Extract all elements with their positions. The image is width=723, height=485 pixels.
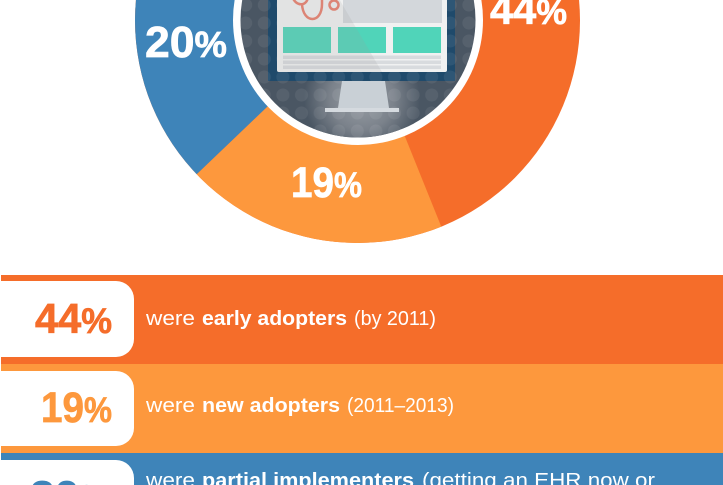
icon: stethoscope bbox=[292, 0, 338, 19]
value: 19% bbox=[41, 384, 112, 432]
row: early adopters bbox=[0, 275, 723, 364]
band bbox=[1, 364, 723, 453]
label: 20%: 20% bbox=[145, 18, 227, 67]
segment: 44% early adopters bbox=[135, 0, 580, 243]
dark circle background bbox=[240, 0, 476, 138]
central monitor illustration bbox=[233, 0, 483, 156]
row: partial implementers bbox=[0, 453, 723, 485]
description: (2011–2013) bbox=[347, 395, 454, 417]
dot texture bbox=[240, 0, 476, 138]
band bbox=[1, 275, 723, 364]
value: 44% bbox=[35, 295, 112, 342]
white tab bbox=[0, 371, 134, 446]
description: new adopters bbox=[202, 395, 340, 417]
donut chart bbox=[135, 0, 580, 243]
top panel bbox=[343, 0, 442, 23]
segment: 19% new adopters bbox=[196, 106, 442, 243]
description bbox=[146, 310, 435, 329]
band bbox=[1, 453, 723, 485]
description: were bbox=[145, 395, 195, 417]
white tab bbox=[0, 281, 134, 357]
row: new adopters bbox=[0, 364, 723, 453]
description bbox=[146, 397, 453, 416]
description: early adopters bbox=[202, 308, 347, 330]
monitor stand bbox=[338, 81, 389, 108]
label: 19%: 19% bbox=[291, 159, 362, 207]
description bbox=[146, 472, 655, 485]
monitor bezel bbox=[268, 0, 455, 81]
screen diagonal shade bbox=[277, 0, 382, 72]
segment: 20% partial implementers bbox=[135, 0, 268, 174]
white tab bbox=[0, 460, 134, 485]
screen bbox=[277, 0, 447, 72]
text lines on screen bbox=[283, 56, 441, 69]
description: (by 2011) bbox=[354, 308, 436, 330]
glow under monitor bbox=[308, 81, 416, 138]
description: were bbox=[145, 308, 195, 330]
green tiles bbox=[283, 27, 441, 53]
white ring bbox=[233, 0, 483, 145]
monitor base bbox=[325, 108, 399, 112]
